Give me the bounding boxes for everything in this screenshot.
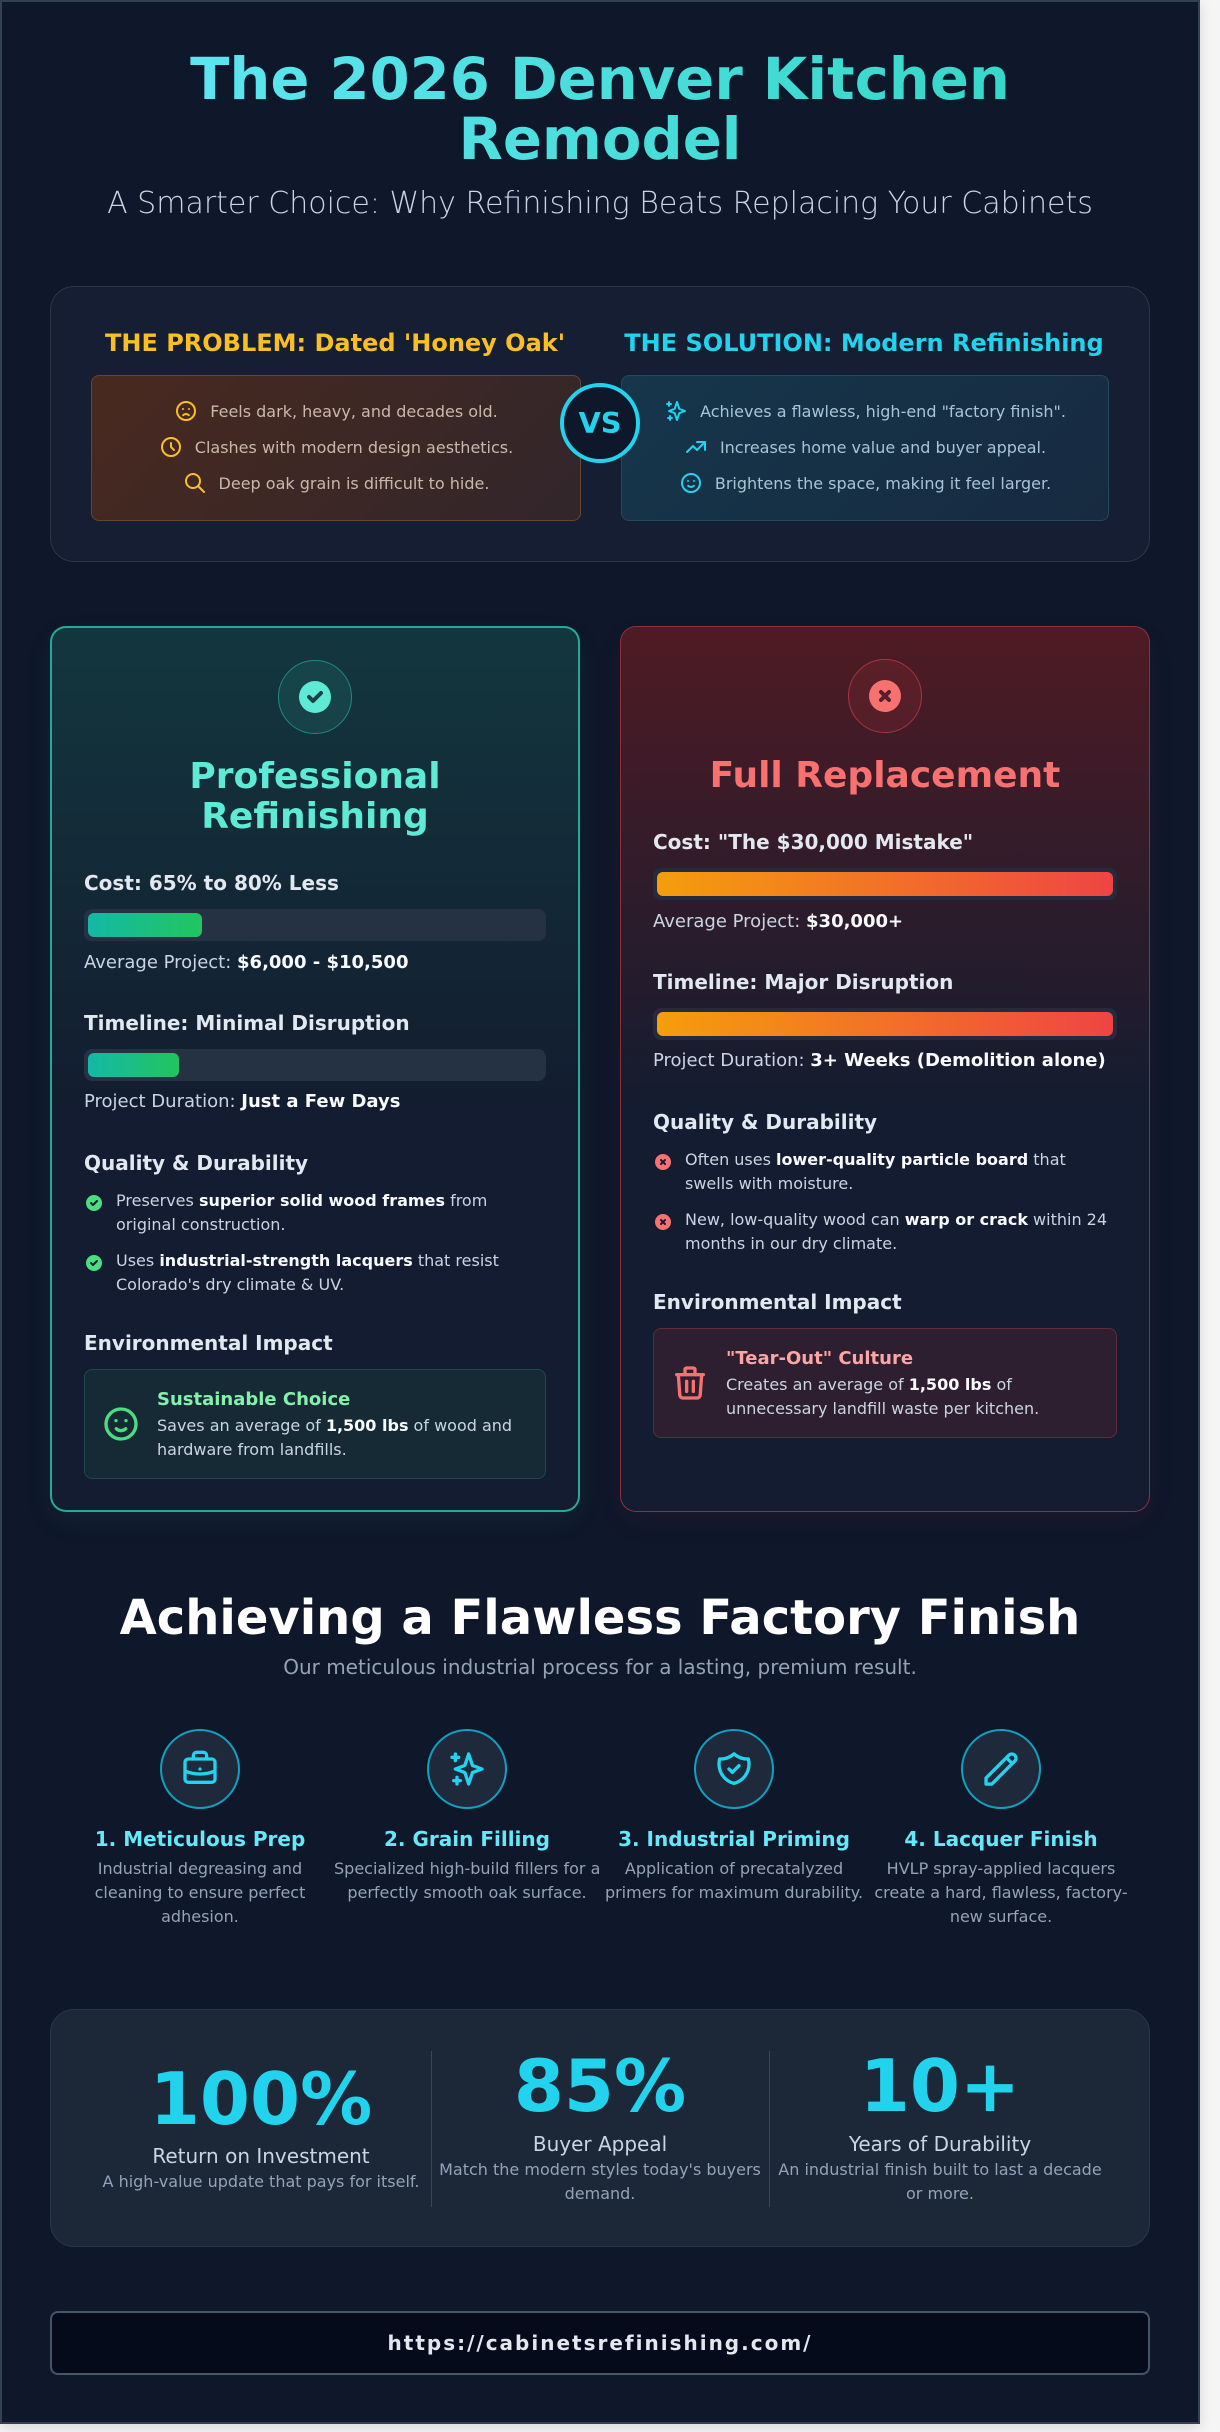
icon: briefcase bbox=[160, 1729, 240, 1809]
tear-out culture callout bbox=[653, 1328, 1117, 1438]
quality label: Quality & Durability bbox=[653, 1110, 877, 1134]
step text: primers for maximum durability. bbox=[605, 1883, 863, 1902]
callout text: Saves an average of 1,500 lbs of wood and bbox=[157, 1416, 512, 1435]
callout title: Sustainable Choice bbox=[157, 1389, 350, 1410]
step text: create a hard, flawless, factory- bbox=[874, 1883, 1128, 1902]
solution item: brightens: Brightens the space, making it feel larger. bbox=[715, 474, 1051, 492]
card heading bbox=[189, 756, 441, 837]
panel: professional refinishing bbox=[50, 626, 580, 1512]
callout text: unnecessary landfill waste per kitchen. bbox=[726, 1399, 1039, 1418]
cost bar bbox=[84, 909, 546, 941]
step title: 1. Meticulous Prep bbox=[95, 1827, 305, 1851]
divider bbox=[769, 2051, 770, 2207]
step text: cleaning to ensure perfect bbox=[95, 1883, 305, 1902]
quality item 1: swells with moisture. bbox=[685, 1174, 853, 1193]
environmental label: Environmental Impact bbox=[653, 1290, 902, 1314]
step text: Specialized high-build fillers for a bbox=[334, 1859, 600, 1878]
sustainable choice callout bbox=[84, 1369, 546, 1479]
step title: 4. Lacquer Finish bbox=[904, 1827, 1098, 1851]
stat text: Match the modern styles today's buyers bbox=[439, 2160, 761, 2179]
cost value: Average Project: $30,000+ bbox=[653, 911, 903, 932]
icon: smile bbox=[104, 1407, 138, 1441]
callout text: hardware from landfills. bbox=[157, 1440, 347, 1459]
icon: x 1 bbox=[655, 1154, 671, 1170]
quality item 1 bbox=[116, 1191, 487, 1234]
cost label: Cost: 65% to 80% Less bbox=[84, 871, 339, 895]
quality label: Quality & Durability bbox=[84, 1151, 308, 1175]
icon: shield bbox=[694, 1729, 774, 1809]
step text bbox=[334, 1859, 600, 1902]
step text: new surface. bbox=[950, 1907, 1052, 1926]
stat: buyer appeal bbox=[439, 2044, 761, 2203]
timeline value: Project Duration: 3+ Weeks (Demolition alone) bbox=[653, 1050, 1106, 1071]
quality item 1: Often uses lower-quality particle board that bbox=[685, 1150, 1066, 1169]
quality item 2: Uses industrial-strength lacquers that resist bbox=[116, 1251, 499, 1270]
subtitle: A Smarter Choice: Why Refinishing Beats Replacing Your Cabinets bbox=[107, 186, 1093, 221]
section heading: Achieving a Flawless Factory Finish bbox=[120, 1590, 1080, 1646]
VS badge: VS bbox=[578, 406, 622, 440]
step title: 2. Grain Filling bbox=[384, 1827, 550, 1851]
quality item 2: Colorado's dry climate & UV. bbox=[116, 1275, 344, 1294]
solution item: value: Increases home value and buyer appeal. bbox=[720, 438, 1046, 456]
divider bbox=[431, 2051, 432, 2207]
stat: years of durability bbox=[778, 2044, 1102, 2203]
step text: Application of precatalyzed bbox=[625, 1859, 843, 1878]
VS badge bbox=[560, 383, 640, 463]
icon: pencil bbox=[961, 1729, 1041, 1809]
quality item 2: months in our dry climate. bbox=[685, 1234, 897, 1253]
icon: x 2 bbox=[655, 1214, 671, 1230]
environmental label: Environmental Impact bbox=[84, 1331, 333, 1355]
footer url bar bbox=[50, 2311, 1150, 2375]
stat text: An industrial finish built to last a decade bbox=[778, 2160, 1102, 2179]
step text bbox=[874, 1859, 1128, 1926]
quality item 1 bbox=[685, 1150, 1066, 1193]
stat text: A high-value update that pays for itself. bbox=[103, 2172, 419, 2191]
stat: return on investment bbox=[102, 2057, 419, 2191]
quality item 2: New, low-quality wood can warp or crack within 24 bbox=[685, 1210, 1107, 1229]
heading: the problem: THE PROBLEM: Dated 'Honey Oak' bbox=[105, 329, 565, 357]
icon: trash bbox=[675, 1366, 705, 1400]
step text: adhesion. bbox=[161, 1907, 239, 1926]
process step 2 bbox=[334, 1729, 600, 1902]
stat text bbox=[439, 2160, 761, 2203]
problem list box bbox=[91, 375, 581, 521]
icon: check 1 bbox=[86, 1195, 102, 1211]
icon: check badge bbox=[278, 660, 352, 734]
title: Remodel bbox=[458, 106, 742, 173]
stat number: 100% bbox=[150, 2057, 372, 2141]
process step 4 bbox=[874, 1729, 1128, 1926]
timeline label: Timeline: Major Disruption bbox=[653, 970, 953, 994]
timeline bar bbox=[653, 1008, 1117, 1040]
callout text bbox=[157, 1416, 512, 1459]
card heading: Refinishing bbox=[201, 796, 429, 837]
problem item: grain: Deep oak grain is difficult to hide. bbox=[219, 474, 489, 492]
problem item: dark: Feels dark, heavy, and decades old. bbox=[210, 402, 498, 420]
heading: the solution: THE SOLUTION: Modern Refinishing bbox=[624, 329, 1104, 357]
title bbox=[0, 50, 1200, 170]
stat label: Buyer Appeal bbox=[533, 2132, 667, 2156]
cost label: Cost: "The $30,000 Mistake" bbox=[653, 830, 973, 854]
title: The 2026 Denver Kitchen bbox=[190, 46, 1010, 113]
stat text: demand. bbox=[565, 2184, 635, 2203]
timeline bar bbox=[84, 1049, 546, 1081]
callout title: "Tear-Out" Culture bbox=[726, 1348, 913, 1369]
panel: statistics bbox=[50, 2009, 1150, 2247]
icon: x badge bbox=[848, 659, 922, 733]
quality item 2 bbox=[116, 1251, 499, 1294]
stat text: or more. bbox=[906, 2184, 974, 2203]
panel: full replacement bbox=[620, 626, 1150, 1512]
solution item: finish: Achieves a flawless, high-end "factory finish". bbox=[700, 402, 1066, 420]
solution list box bbox=[621, 375, 1109, 521]
quality item 1: original construction. bbox=[116, 1215, 285, 1234]
footer url bar: https://cabinetsrefinishing.com/ bbox=[388, 2331, 812, 2355]
icon: sparkles bbox=[427, 1729, 507, 1809]
stat text bbox=[778, 2160, 1102, 2203]
process step 3 bbox=[605, 1729, 863, 1902]
step text bbox=[605, 1859, 863, 1902]
step text: Industrial degreasing and bbox=[98, 1859, 302, 1878]
stat number: 85% bbox=[514, 2044, 686, 2128]
cost bar bbox=[653, 868, 1117, 900]
callout text: Creates an average of 1,500 lbs of bbox=[726, 1375, 1012, 1394]
problem item: clashes: Clashes with modern design aesthetics. bbox=[195, 438, 513, 456]
icon: check 2 bbox=[86, 1255, 102, 1271]
stat label: Return on Investment bbox=[152, 2144, 370, 2168]
process step 1 bbox=[95, 1729, 305, 1926]
stat label: Years of Durability bbox=[849, 2132, 1031, 2156]
cost value: Average Project: $6,000 - $10,500 bbox=[84, 952, 408, 973]
callout text bbox=[726, 1375, 1039, 1418]
timeline value: Project Duration: Just a Few Days bbox=[84, 1091, 400, 1112]
quality item 1: Preserves superior solid wood frames from bbox=[116, 1191, 487, 1210]
card heading: Full Replacement bbox=[710, 755, 1060, 796]
step title: 3. Industrial Priming bbox=[618, 1827, 850, 1851]
step text: perfectly smooth oak surface. bbox=[347, 1883, 587, 1902]
stat number: 10+ bbox=[860, 2044, 1020, 2128]
step text: HVLP spray-applied lacquers bbox=[887, 1859, 1115, 1878]
panel: problem vs solution bbox=[50, 286, 1150, 562]
quality item 2 bbox=[685, 1210, 1107, 1253]
step text bbox=[95, 1859, 305, 1926]
card heading: Professional bbox=[189, 756, 441, 797]
timeline label: Timeline: Minimal Disruption bbox=[84, 1011, 410, 1035]
section subheading: Our meticulous industrial process for a lasting, premium result. bbox=[283, 1655, 917, 1679]
